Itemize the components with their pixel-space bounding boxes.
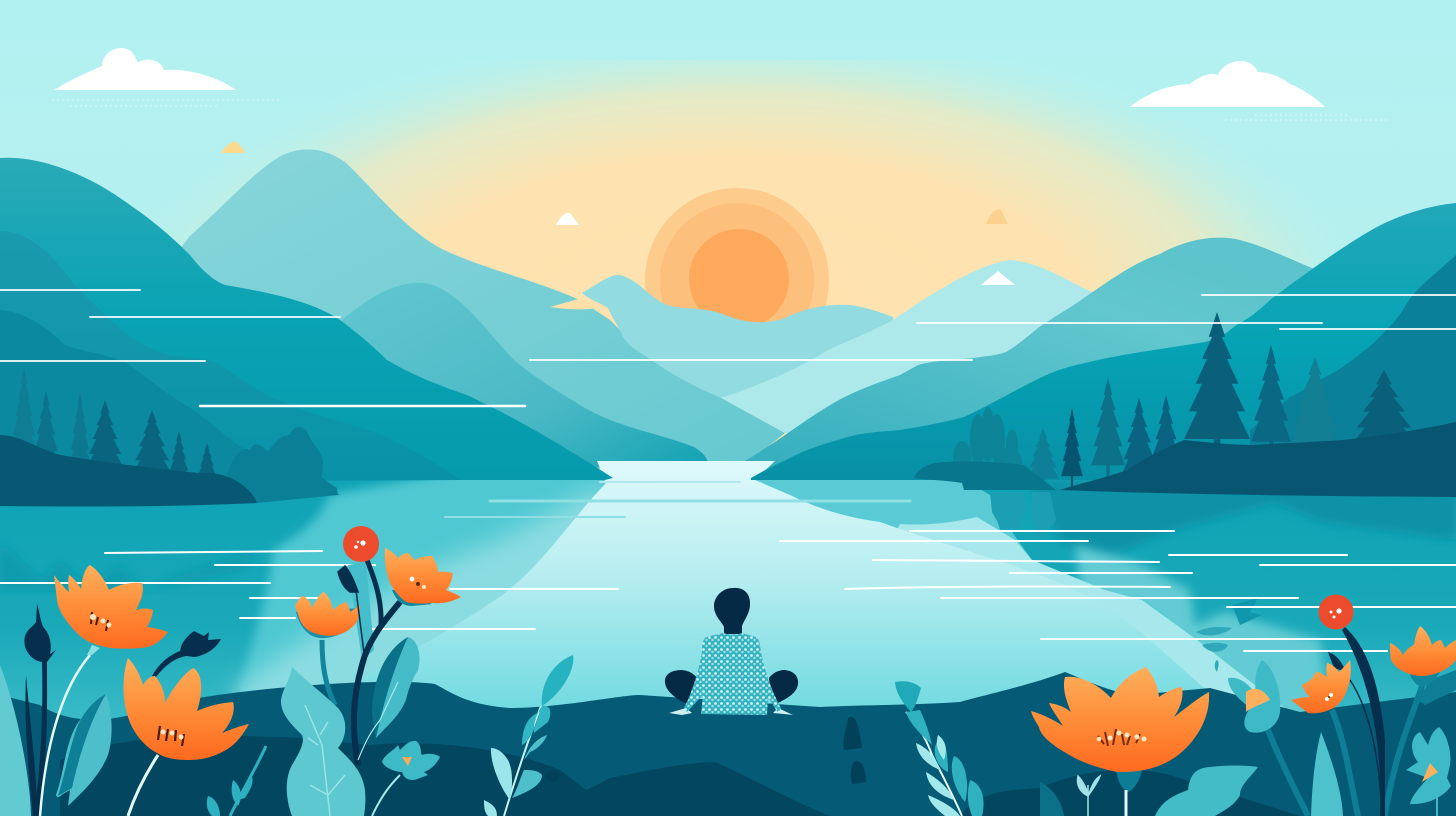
cloud: top right	[1130, 61, 1388, 120]
small dark bud beside stem	[338, 566, 364, 653]
plants: right-of-centre sprig	[895, 681, 984, 816]
white stem of lower flower	[128, 755, 158, 816]
white water streaks	[0, 290, 1456, 651]
dark bud and stem	[24, 604, 56, 816]
sunrise glow	[0, 60, 1456, 500]
small ripple shapes	[1196, 627, 1232, 672]
thin dark blade	[25, 675, 38, 816]
plants: left foreground	[0, 565, 266, 816]
pale teal spear leaf	[1311, 732, 1343, 816]
flower: large orange bloom	[1031, 667, 1209, 816]
teal star flower	[372, 741, 440, 816]
mountain: right darker ridge	[1250, 255, 1456, 490]
lake soft shimmer left	[223, 480, 606, 694]
small distant clouds	[221, 142, 1008, 225]
lake	[0, 461, 1456, 740]
dark main stem	[354, 602, 400, 765]
dark stem of red bud	[367, 560, 381, 625]
flower: left lower orange	[124, 658, 249, 760]
flower: orange, upper right of stem	[385, 548, 461, 606]
dark stem of red bud	[1342, 627, 1385, 816]
flower: orange upper right	[1390, 626, 1456, 687]
reflection of forest trees	[990, 492, 1056, 540]
thin white stem	[358, 682, 398, 760]
lake paler band	[800, 517, 1300, 720]
lake right shimmer	[1070, 542, 1328, 712]
person meditating	[665, 588, 798, 715]
shrubs on left shore	[225, 427, 338, 503]
plants: centre left cluster	[281, 526, 461, 816]
thin dark stem	[1350, 680, 1382, 816]
lake mid teal left	[240, 480, 606, 692]
red ball bud right	[1318, 594, 1354, 630]
ground: darker lower right	[960, 770, 1300, 816]
teal two-tone leaf	[56, 694, 112, 806]
reflection jagged patch	[1232, 598, 1262, 625]
flower: orange side-facing	[1291, 660, 1351, 713]
red ball bud	[343, 526, 379, 562]
dark bud behind side flower	[1328, 652, 1346, 672]
mountain: right pale peak	[721, 260, 1100, 470]
mountain: left large ridge	[0, 158, 613, 480]
mountain: right rear ridge	[745, 238, 1456, 480]
forest: left shore	[0, 367, 338, 507]
mountain: left middle teal	[340, 283, 708, 480]
teal curving stems	[1332, 680, 1424, 816]
ground: darker centre knoll	[530, 762, 830, 816]
ground: darker lower left	[60, 736, 620, 816]
plants: centre sprig	[484, 655, 573, 816]
plants: lower right cluster	[1040, 594, 1456, 816]
sun	[645, 188, 829, 372]
left shore land	[0, 435, 257, 507]
foreground ground	[0, 672, 1456, 816]
legs	[665, 670, 798, 705]
flower: teal with orange heart	[1228, 660, 1280, 733]
cloud: top left	[52, 48, 280, 106]
head and neck	[714, 588, 750, 634]
flower: teal-backed bowl flower	[295, 592, 360, 638]
sky background	[0, 0, 1456, 520]
small teal sprig	[207, 746, 266, 816]
mountain: left darker ridge	[0, 231, 460, 482]
teal strap behind stem	[348, 562, 374, 660]
lake pale centre	[280, 461, 1240, 720]
teal stem of blue flower	[1268, 730, 1308, 816]
lake blurred tone layers	[230, 470, 1456, 740]
ground: main shoreline	[0, 672, 1456, 816]
flower: left upper orange	[54, 565, 168, 655]
patterned shirt and arms	[684, 633, 781, 715]
mountain: far left pale peak	[170, 149, 785, 480]
lake right mid teal	[751, 479, 1300, 720]
mountain: left darkest foot	[0, 310, 340, 500]
ground pebbles	[547, 717, 866, 784]
mountain: centre in front of the sun	[582, 275, 900, 400]
teal stem of bowl flower	[322, 640, 335, 705]
teal flower lower right corner	[1406, 727, 1451, 816]
reflection of left trees	[0, 540, 260, 590]
forest: right shore	[914, 312, 1456, 497]
right shore round shrubs	[953, 407, 1022, 476]
pale lobed leaf	[1155, 766, 1258, 816]
right shore dark land	[1060, 422, 1456, 497]
dark closed bud	[152, 631, 221, 677]
mountain: right middle ridge	[751, 203, 1456, 480]
lake right reflection dark band	[1028, 480, 1456, 560]
right shore mid land	[914, 461, 1056, 490]
far left pale leaf	[0, 665, 31, 816]
large pale leaf	[281, 667, 365, 816]
small forked pale sprig	[1077, 776, 1100, 816]
white stem of orange flower	[40, 655, 90, 816]
dark teal blade	[1040, 782, 1064, 816]
sand-coloured sliver between peaks	[550, 299, 610, 309]
lake base water	[0, 478, 1456, 728]
small white cloud on right peak	[981, 271, 1015, 285]
leaf right of stem	[374, 637, 420, 738]
hands	[669, 708, 793, 715]
